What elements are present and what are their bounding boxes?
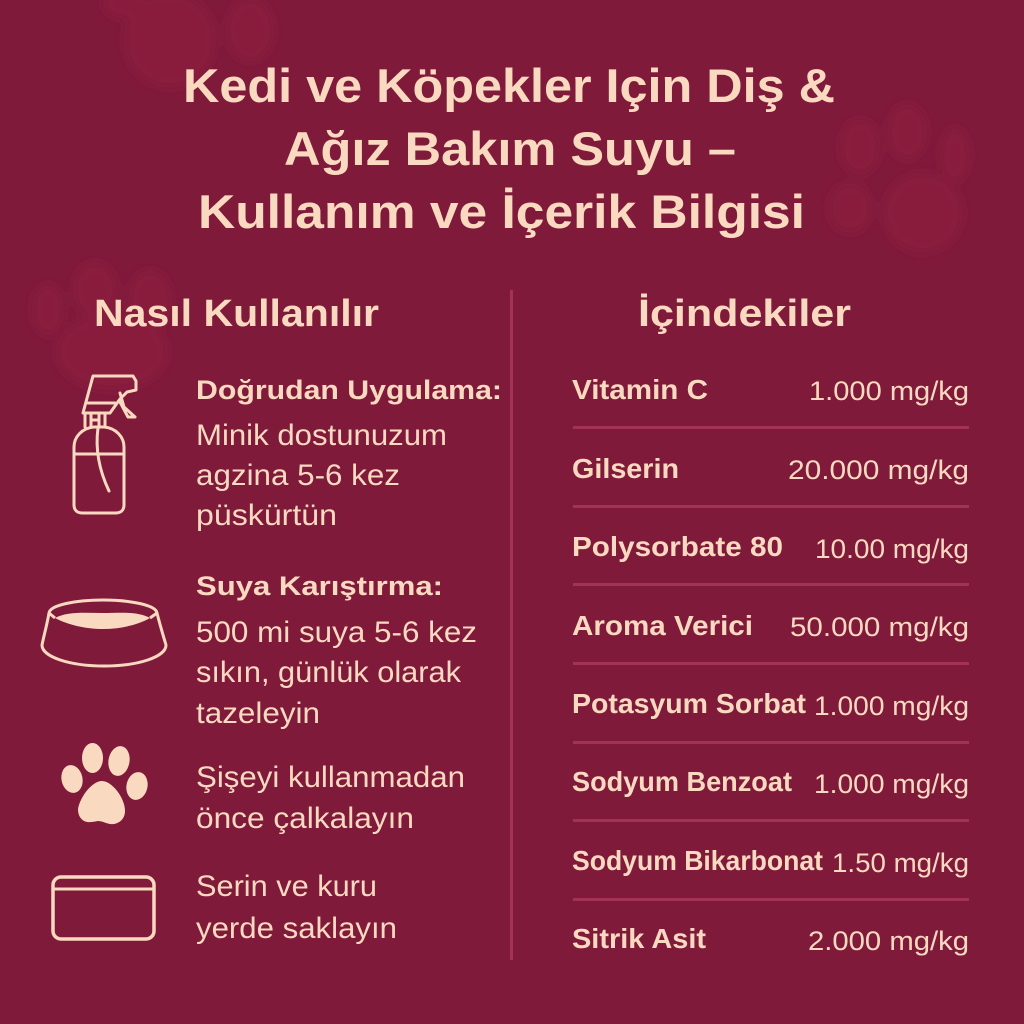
text: Doğrudan Uygulama: Doğrudan Uygulama: <box>196 375 502 405</box>
title <box>183 59 835 238</box>
row: Vitamin C <box>572 374 969 429</box>
row: Vitamin C: 1.000 mg/kg <box>809 376 969 406</box>
row: Gilserin: 20.000 mg/kg <box>788 455 969 485</box>
row: Aroma Verici: 50.000 mg/kg <box>790 612 969 642</box>
text: Şişeyi kullanmadan: önce çalkalayın <box>196 802 414 835</box>
row: Vitamin C: Vitamin C <box>572 374 708 405</box>
row: Sitrik Asit: Sitrik Asit <box>572 923 706 954</box>
title: Kedi ve Köpekler Için Diş & <box>183 59 835 112</box>
row: Polysorbate 80 <box>572 531 969 586</box>
row: Polysorbate 80: Polysorbate 80 <box>572 531 783 562</box>
heading: Nasıl Kullanılır: Nasıl Kullanılır <box>94 293 379 335</box>
row: Sodyum Benzoat: 1.000 mg/kg <box>814 769 969 799</box>
text: Şişeyi kullanmadan <box>196 761 465 835</box>
text: Suya Karıştırma: 500 mi suya 5-6 kez <box>196 616 477 649</box>
title: Ağız Bakım Suyu – <box>284 122 736 175</box>
row: Aroma Verici: Aroma Verici <box>572 610 753 641</box>
background paw prints <box>32 0 970 390</box>
row: Sodyum Bikarbonat: Sodyum Bikarbonat <box>572 845 823 876</box>
text: Suya Karıştırma: sıkın, günlük olarak <box>196 656 462 689</box>
text: Suya Karıştırma: Suya Karıştırma: <box>196 571 443 601</box>
text: Doğrudan Uygulama: püskürtün <box>196 499 337 532</box>
text: Suya Karıştırma: tazeleyin <box>196 697 320 730</box>
row: Gilserin: Gilserin <box>572 453 679 484</box>
row: Potasyum Sorbat: 1.000 mg/kg <box>814 691 969 721</box>
text: Serin ve kuru: yerde saklayın <box>196 912 397 945</box>
row: Potasyum Sorbat: Potasyum Sorbat <box>572 688 806 719</box>
text: Doğrudan Uygulama: Minik dostunuzum <box>196 419 447 452</box>
row: Sodyum Bikarbonat: 1.50 mg/kg <box>832 848 969 878</box>
row: Sitrik Asit: 2.000 mg/kg <box>808 926 969 956</box>
row: Polysorbate 80: 10.00 mg/kg <box>815 534 969 564</box>
text: Şişeyi kullanmadan: Şişeyi kullanmadan <box>196 761 465 794</box>
icon: storage box <box>53 877 154 939</box>
heading: İçindekiler: İçindekiler <box>638 293 851 335</box>
row: Sodyum Benzoat <box>572 766 969 822</box>
row: Sitrik Asit <box>572 923 969 956</box>
icon: water bowl <box>42 600 166 666</box>
icon: spray bottle <box>74 376 136 513</box>
text: Doğrudan Uygulama: agzina 5-6 kez <box>196 459 400 492</box>
row: Sodyum Benzoat: Sodyum Benzoat <box>572 766 792 797</box>
text: Doğrudan Uygulama <box>196 375 502 532</box>
text: Serin ve kuru: Serin ve kuru <box>196 870 377 903</box>
row: Gilserin <box>572 453 969 508</box>
text: Serin ve kuru <box>196 870 397 945</box>
row: Potasyum Sorbat <box>572 688 969 744</box>
icon: paw <box>59 743 150 824</box>
title: Kullanım ve İçerik Bilgisi <box>198 185 805 238</box>
column divider <box>510 290 513 960</box>
row: Aroma Verici <box>572 610 969 665</box>
row: Sodyum Bikarbonat <box>572 845 969 901</box>
text: Suya Karıştırma <box>196 571 477 730</box>
